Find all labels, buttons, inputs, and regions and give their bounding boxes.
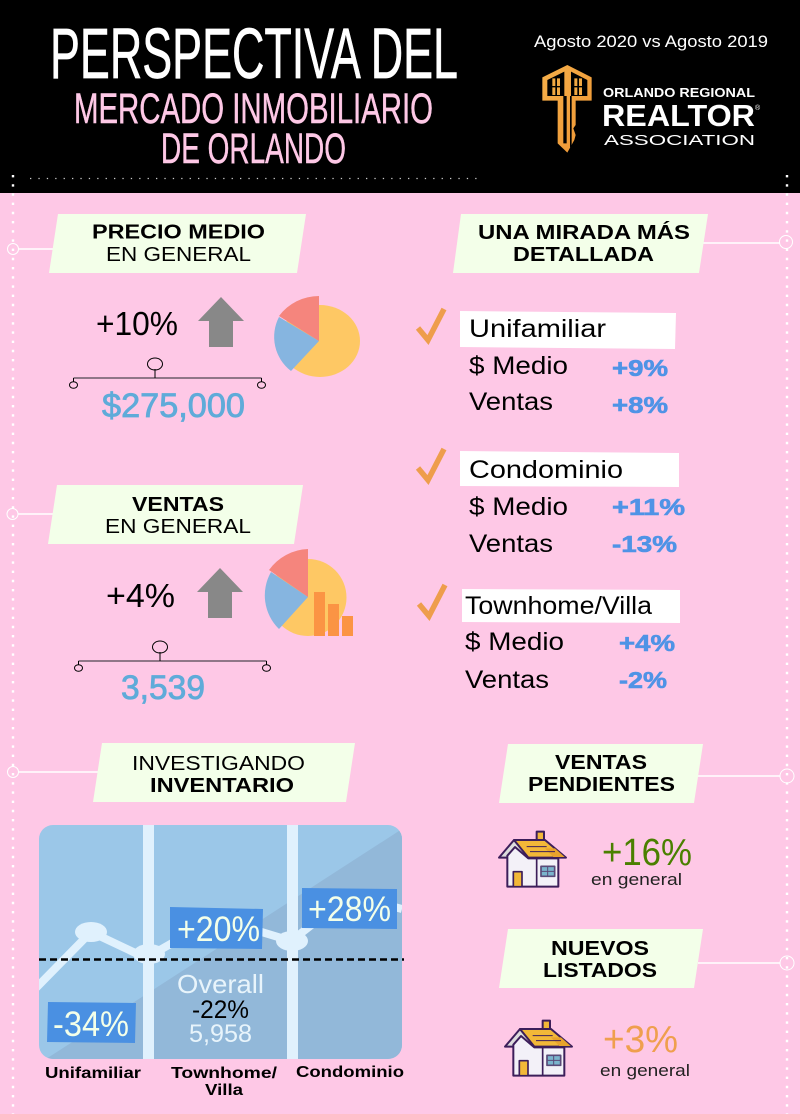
title: PERSPECTIVA DEL (50, 15, 458, 94)
panel: ventas pendientes: VENTAS (555, 751, 647, 774)
overall stat: -22% (192, 996, 249, 1024)
icon: house key (542, 65, 592, 153)
arrow: up (198, 297, 244, 347)
panel: una mirada mas detallada (453, 214, 792, 273)
chart: inventory (36, 825, 404, 1059)
chart category labels (45, 1064, 404, 1099)
panel: investigando inventario (8, 743, 355, 802)
logo: Orlando Regional Realtor Association: ORLANDO REGIONAL (603, 86, 755, 100)
section: condominio: Ventas (469, 530, 553, 558)
stat: precio medio +10%: +10% (96, 305, 178, 342)
panel: ventas pendientes (499, 744, 794, 803)
section: townhome villa (419, 585, 680, 694)
logo: Orlando Regional Realtor Association: ® (755, 104, 761, 112)
chart category labels: Villa (205, 1082, 243, 1099)
section: condominio: Condominio (469, 456, 623, 484)
date range: Agosto 2020 vs Agosto 2019 (534, 32, 768, 51)
section: unifamiliar: +9% (612, 355, 668, 381)
connector: sales tree (74, 641, 270, 671)
title: MERCADO INMOBILIARIO (74, 85, 433, 133)
section: condominio: -13% (612, 531, 677, 557)
panel: ventas pendientes: PENDIENTES (528, 773, 675, 796)
callout: townhome +20%: +20% (177, 910, 260, 949)
callout: condominio +28%: +28% (308, 890, 391, 929)
value: median price: $275,000 (102, 387, 245, 425)
stat: pendientes +16%: +16% (602, 832, 692, 874)
panel: precio medio: PRECIO MEDIO (92, 220, 265, 244)
title: DE ORLANDO (161, 125, 346, 173)
panel: ventas: VENTAS (132, 493, 224, 516)
panel: precio medio (8, 214, 306, 273)
section: unifamiliar: Unifamiliar (469, 315, 606, 343)
title (50, 15, 458, 173)
panel: investigando inventario: INVENTARIO (150, 774, 294, 797)
stat: nuevos listados +3%: en general (600, 1061, 690, 1080)
overall stat: Overall (177, 969, 264, 999)
section: condominio (418, 449, 685, 558)
icon: pie and bars (265, 549, 353, 636)
logo: Orlando Regional Realtor Association: ASSOCIATION (604, 132, 755, 149)
panel: ventas: EN GENERAL (105, 515, 251, 538)
section: condominio: $ Medio (469, 493, 568, 521)
panel: una mirada mas detallada: UNA MIRADA MÁS (478, 221, 690, 244)
section: townhome villa: $ Medio (465, 628, 564, 656)
logo: Orlando Regional Realtor Association (542, 65, 761, 153)
section: unifamiliar: $ Medio (469, 352, 568, 380)
icon: pie chart (274, 296, 360, 377)
panel: nuevos listados: LISTADOS (543, 959, 657, 982)
stat: nuevos listados +3% (600, 1019, 690, 1080)
chart category labels: Townhome/ (171, 1065, 278, 1082)
section: townhome villa: Townhome/Villa (465, 592, 652, 620)
stat: pendientes +16%: en general (591, 870, 682, 889)
overall stat: 5,958 (189, 1020, 252, 1048)
panel: investigando inventario: INVESTIGANDO (132, 752, 305, 775)
callout: unifamiliar -34%: -34% (53, 1005, 129, 1044)
value: sales count: 3,539 (121, 669, 205, 707)
chart category labels: Unifamiliar (45, 1065, 141, 1082)
panel: nuevos listados (499, 929, 794, 988)
section: townhome villa: Ventas (465, 666, 549, 694)
stat: ventas +4%: +4% (106, 577, 175, 614)
panel: precio medio: EN GENERAL (106, 243, 251, 266)
section: townhome villa: +4% (619, 630, 675, 656)
connector: price tree (70, 358, 266, 388)
overall stat (177, 969, 264, 1048)
panel: una mirada mas detallada: DETALLADA (513, 243, 654, 266)
section: townhome villa: -2% (619, 667, 667, 693)
panel: nuevos listados: NUEVOS (551, 937, 649, 960)
section: condominio: +11% (612, 494, 685, 520)
panel: ventas (7, 485, 303, 544)
stat: pendientes +16% (591, 832, 692, 889)
section: unifamiliar: Ventas (469, 388, 553, 416)
stat: nuevos listados +3%: +3% (603, 1019, 678, 1061)
section: unifamiliar (418, 309, 676, 418)
icon: house (505, 1021, 572, 1076)
section: unifamiliar: +8% (612, 392, 668, 418)
arrow: up (197, 568, 243, 618)
logo: Orlando Regional Realtor Association: REALTOR (602, 98, 755, 133)
icon: house (499, 832, 566, 887)
chart category labels: Condominio (296, 1064, 404, 1081)
